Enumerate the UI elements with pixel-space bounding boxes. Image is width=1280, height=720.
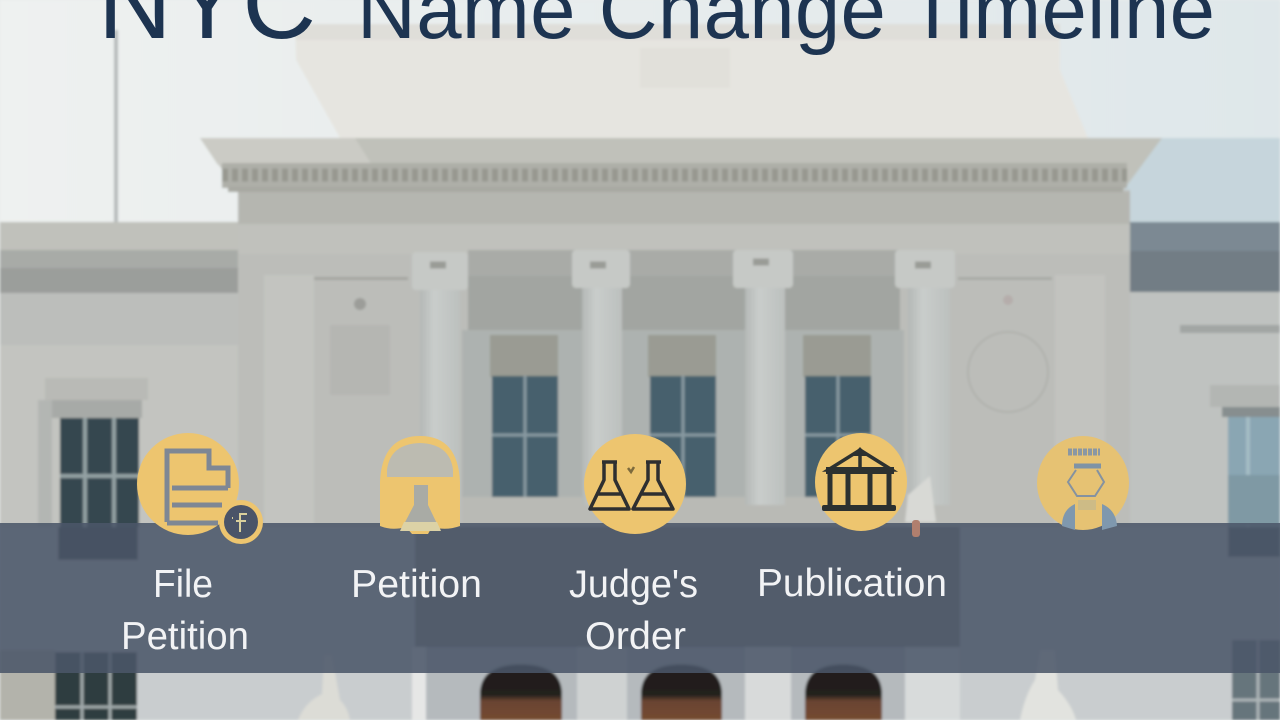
label: Publication: Publication — [757, 562, 947, 605]
flame-coloured ornament detail — [912, 520, 920, 537]
label: File Petition — [121, 563, 249, 658]
label: File Petition: Petition — [121, 615, 249, 658]
lower facade with doors, statues and windows — [0, 527, 1280, 720]
left wing — [0, 222, 240, 560]
central facade wall — [238, 190, 1130, 535]
step 1: file petition — [121, 433, 263, 658]
step 5: icon of a person — [1037, 436, 1129, 530]
step 2: petition — [351, 436, 482, 606]
portico recess, windows and columns — [412, 250, 955, 527]
step 3: judge's order — [569, 434, 698, 658]
icon: two flasks — [584, 434, 686, 534]
label: Judge's Order: Order — [585, 615, 686, 658]
icon: document with seal — [137, 433, 263, 544]
label: Judge's Order — [569, 563, 698, 658]
icon: courthouse — [815, 433, 907, 531]
label: Judge's Order: Judge's — [569, 563, 698, 606]
label: File Petition: File — [153, 563, 213, 606]
step 4: publication — [757, 433, 947, 605]
icon: arched flask badge — [380, 436, 460, 534]
cornice with dentil frieze — [200, 138, 1162, 192]
label: Petition: Petition — [351, 563, 482, 606]
right wing — [1128, 222, 1280, 557]
horizontal label band — [0, 523, 1280, 673]
attic storey of the courthouse — [295, 24, 1088, 138]
